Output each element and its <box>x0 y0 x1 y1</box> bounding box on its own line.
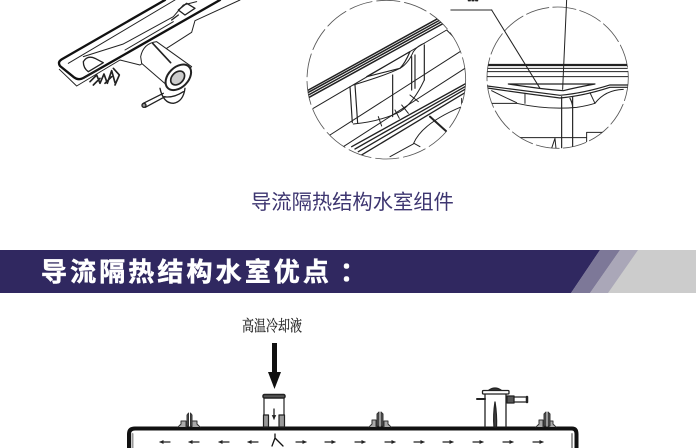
flow split at inlet <box>272 434 283 446</box>
radiator tank <box>129 428 576 448</box>
leader lines <box>451 0 567 89</box>
caption: 导流隔热结构水室组件 <box>251 192 454 214</box>
mounting clip: left <box>178 413 200 427</box>
banner background <box>0 250 696 293</box>
filler neck and cap <box>477 388 527 427</box>
detail circle: right <box>487 7 629 148</box>
flow arrows: left <box>160 441 258 443</box>
banner heading: ： <box>340 257 369 287</box>
detail circle: left <box>307 0 467 159</box>
mounting clip: middle <box>369 412 391 427</box>
coolant label: 高温冷却液 <box>242 317 302 335</box>
mounting clip: right <box>536 412 556 427</box>
inlet pipe <box>263 394 285 427</box>
water chamber part drawing <box>59 0 240 107</box>
banner heading: 导流隔热结构水室优点 <box>41 257 332 287</box>
coolant inlet arrow <box>268 343 281 389</box>
flow arrows: right <box>296 441 543 443</box>
